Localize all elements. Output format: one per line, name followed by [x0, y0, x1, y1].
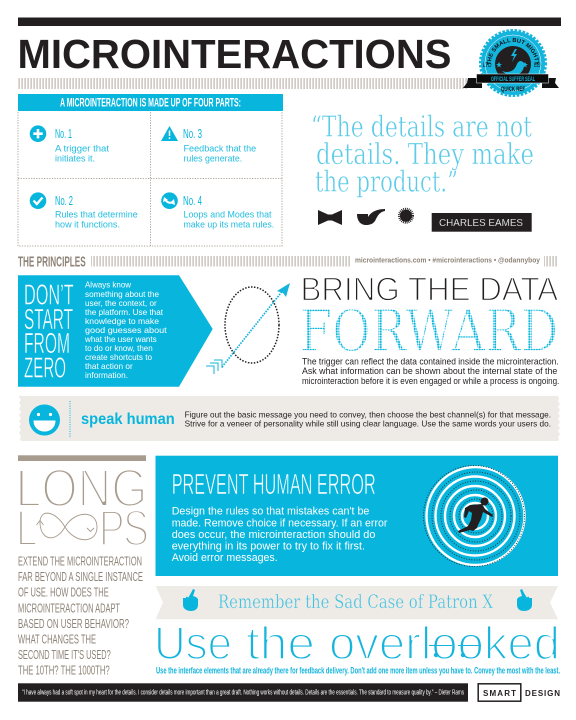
body copy [172, 506, 388, 564]
body copy: WHAT CHANGES THE [18, 631, 96, 646]
body copy: OF USE. HOW DOES THE [18, 585, 109, 600]
eye pupils [434, 653, 465, 657]
body copy: made. Remove choice if necessary. If an error [172, 517, 388, 529]
top bar [18, 18, 561, 26]
part 2 copy: how it functions. [55, 220, 120, 230]
part 4 copy: Loops and Modes that [184, 210, 272, 220]
icon: smiley [29, 404, 60, 436]
heading: PREVENT HUMAN ERROR [172, 469, 376, 501]
body copy: something about the [85, 289, 159, 299]
body copy: FAR BEYOND A SINGLE INSTANCE [18, 569, 143, 584]
body copy: THE 10TH? THE 1000TH? [18, 663, 110, 678]
ribbon text: OFFICIAL SUFFER SEAL [491, 76, 535, 83]
icon: plus [30, 125, 46, 142]
heading: DON’T [24, 279, 74, 311]
heading: long: LONG [16, 458, 148, 518]
seal arc text: THE SMALL BUT MIGHTY [487, 38, 539, 65]
eye lines in the double o [429, 644, 481, 646]
dotted zero [225, 287, 279, 363]
heading: FROM [24, 328, 70, 360]
section heading: the principles: THE PRINCIPLES [18, 254, 86, 271]
hatch rule under title [18, 78, 468, 89]
panel background [156, 456, 558, 576]
icon: infinity loop with arrows [36, 513, 97, 540]
section links: microinteractions.com • #microinteractions • @odannyboy [355, 258, 540, 265]
bring the data copy: The trigger can reflect the data contained inside the microinteraction. [302, 356, 559, 366]
body copy: create shortcuts to [85, 352, 152, 362]
heading: use the overlooked [154, 617, 560, 669]
icon: zero with arrow [206, 283, 290, 374]
logo box [478, 684, 521, 701]
ribbon [156, 586, 558, 619]
icon: spiral with falling figure [424, 466, 524, 566]
ED label: ED [534, 62, 541, 69]
body copy: Design the rules so that mistakes can't be [172, 506, 369, 518]
part 3 label: No. 3 [183, 126, 202, 141]
hatch rule right [544, 256, 558, 266]
LTD label: LTD [483, 62, 492, 69]
icon: warning [161, 126, 178, 141]
part 3 copy [184, 144, 256, 164]
part 4 label: No. 4 [183, 193, 202, 208]
quote: the product.” [315, 165, 458, 199]
bring the data copy: Ask what information can be shown about the internal state of the [302, 366, 557, 376]
logo: smart design [478, 684, 560, 701]
part 1 copy: initiates it. [55, 154, 95, 164]
icon: pipe [357, 209, 385, 225]
part 1 copy [55, 144, 110, 164]
serrated blue disc [481, 31, 545, 95]
icon: right hand [517, 589, 532, 611]
ribbon tails [463, 78, 559, 88]
panel header text: A MICROINTERACTION IS MADE UP OF FOUR PARTS: [60, 96, 241, 110]
arrow head [277, 283, 290, 297]
body copy [84, 280, 167, 380]
seal badge [463, 29, 559, 97]
part 2 copy: Rules that determine [55, 210, 138, 220]
body copy: MICROINTERACTION ADAPT [18, 600, 120, 615]
body copy: good guesses about [85, 325, 167, 335]
heading: loops, the double O drawn as an infinity loop: LOOPS [16, 499, 149, 557]
inner black disc [495, 46, 531, 82]
part 3 copy: rules generate. [184, 154, 242, 164]
heading: ZERO [24, 353, 66, 385]
body copy [18, 553, 143, 678]
heading: START [24, 304, 73, 336]
panel: four parts [18, 94, 283, 246]
part 3 [161, 126, 256, 164]
ribbon band [476, 74, 548, 83]
logo word design: DESIGN [525, 689, 560, 698]
arrow fletching [206, 360, 222, 374]
dotted grid [18, 112, 282, 246]
bird icon [502, 61, 526, 78]
panel: long loops [16, 455, 149, 678]
arrow shape [18, 275, 213, 387]
icon: bow tie [318, 210, 342, 225]
part 1 copy: A trigger that [55, 144, 110, 154]
ticket band [19, 395, 560, 441]
dotted divider [69, 401, 71, 438]
falling figure [458, 498, 493, 533]
body copy: to do or know, then [85, 343, 153, 353]
heading: use the overlooked: overlooked [329, 617, 560, 669]
body copy: information. [85, 370, 128, 380]
icon: check [30, 192, 46, 209]
panel: don't start from zero [18, 275, 213, 387]
stars [496, 62, 528, 68]
part 4 copy: make up its meta rules. [184, 220, 274, 230]
hatch rule left [91, 256, 351, 266]
attribution box [432, 213, 532, 232]
attribution text: CHARLES EAMES [439, 218, 523, 229]
bring the data copy [302, 356, 559, 386]
body copy: user, the context, or [85, 298, 157, 308]
panel header [18, 94, 283, 111]
heading: bring the data: BRING THE DATA [300, 271, 558, 308]
dotted black rings [424, 466, 524, 566]
icon: loop arrow [161, 192, 178, 209]
body copy: what the user wants [84, 334, 157, 344]
icon: left hand [183, 589, 198, 611]
banner: patron x [156, 586, 558, 619]
heading: use the overlooked: the [246, 617, 315, 669]
body copy: SECOND TIME IT'S USED? [18, 647, 111, 662]
speak human label: speak human [81, 411, 175, 428]
logo word smart: SMART [483, 689, 516, 698]
body copy: that action or [85, 361, 133, 371]
part 2 [30, 192, 138, 230]
part 3 copy: Feedback that the [184, 144, 256, 154]
lightning icon [511, 49, 517, 62]
body copy: Avoid error messages. [172, 552, 278, 564]
speak human copy: Figure out the basic message you need to convey, then choose the best channel(s) for that message. [185, 409, 551, 419]
heading: use the overlooked: Use [154, 617, 232, 669]
body copy: knowledge to make [85, 316, 159, 326]
banner text: Remember the Sad Case of Patron X [218, 591, 493, 613]
dotted arrow shaft [222, 289, 284, 367]
quick ref text: QUICK REF [501, 87, 525, 93]
part 4 copy [184, 210, 274, 230]
panel: speak human [19, 395, 560, 441]
speak human copy: Strive for a veneer of personality while still using clear language. Use the same words your users do. [185, 419, 551, 429]
top bar [18, 455, 146, 461]
body copy: does occur, the microinteraction should do [172, 529, 375, 541]
part 1 label: No. 1 [55, 126, 72, 141]
part 1 [30, 125, 110, 164]
body copy: the platform. Use that [85, 307, 164, 317]
part 2 copy [55, 210, 138, 230]
body copy: Always know [85, 280, 132, 290]
icon: starburst [400, 210, 412, 222]
part 4 [161, 192, 274, 230]
panel: prevent human error [156, 456, 558, 576]
part 2 label: No. 2 [55, 193, 73, 208]
body copy: everything in its power to try to fix it first. [172, 540, 365, 552]
quote [311, 110, 534, 199]
title: MICROINTERACTIONS [18, 31, 452, 77]
body copy: EXTEND THE MICROINTERACTION [18, 553, 142, 568]
footer quote bar [18, 683, 468, 702]
white spiral rings [426, 467, 524, 565]
speak human copy [185, 409, 551, 429]
body copy: BASED ON USER BEHAVIOR? [18, 616, 129, 631]
heading [24, 279, 74, 385]
